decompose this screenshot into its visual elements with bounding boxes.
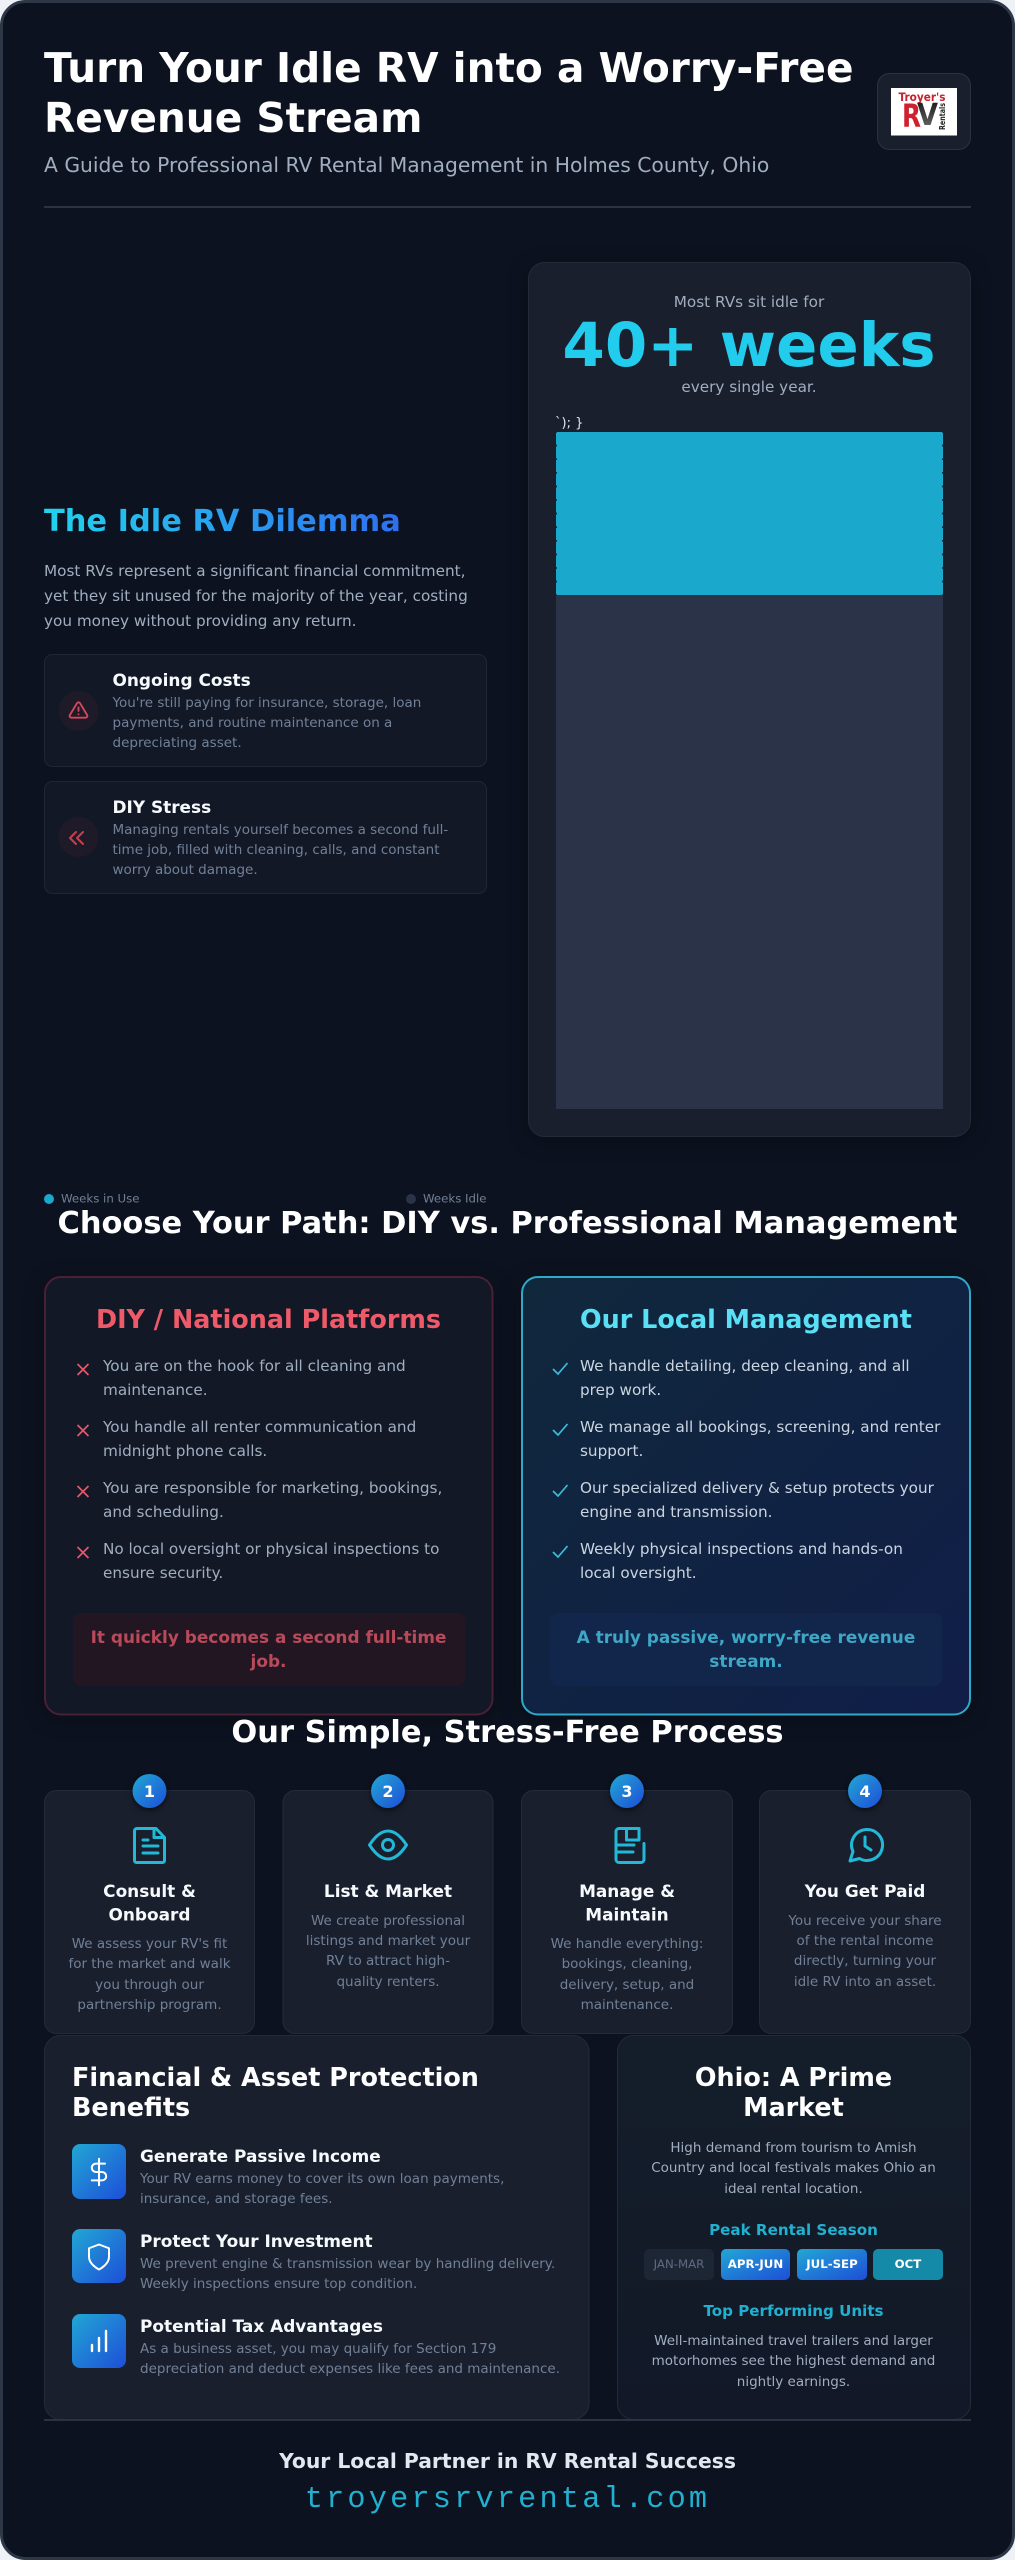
footer: Your Local Partner in RV Rental Success xyxy=(278,2449,736,2473)
heading: choose your path: Choose Your Path: DIY vs. Professional Management xyxy=(58,1206,957,1241)
panel: local management: Our Local Management xyxy=(580,1304,912,1334)
list: local benefits: Our specialized delivery & setup protects your xyxy=(580,1479,935,1497)
step 4: of the rental income xyxy=(797,1933,933,1949)
step 4: You receive your share xyxy=(787,1913,942,1929)
season timeline: APR-JUN xyxy=(728,2257,783,2271)
card: ongoing costs: You're still paying for insurance, storage, loan xyxy=(112,695,421,711)
benefit: protect investment: We prevent engine & transmission wear by handling delivery. xyxy=(140,2256,555,2272)
chart legend: Weeks Idle xyxy=(423,1192,486,1206)
step 1: We assess your RV's fit xyxy=(72,1936,227,1952)
logo: Troyer's xyxy=(898,90,946,104)
step 1: 1 xyxy=(144,1782,155,1801)
icon: shield xyxy=(89,2244,109,2270)
step 2: 2 xyxy=(382,1782,394,1801)
logo: R xyxy=(902,97,921,135)
benefit: passive income: insurance, and storage fees. xyxy=(140,2191,333,2207)
intro paragraph: Most RVs represent a significant financial commitment, xyxy=(44,562,465,580)
intro paragraph: you money without providing any return. xyxy=(44,612,357,630)
intro paragraph: yet they sit unused for the majority of the year, costing xyxy=(44,587,468,605)
list: DIY drawbacks: midnight phone calls. xyxy=(103,1442,267,1460)
card: DIY stress: time job, filled with cleaning, calls, and constant xyxy=(112,842,440,858)
panel: local management xyxy=(522,1277,970,1714)
heading: The Idle RV Dilemma xyxy=(44,504,401,539)
panel: 40+ weeks chart: Most RVs sit idle for xyxy=(674,293,825,311)
chart legend xyxy=(44,1192,486,1206)
benefit: protect investment xyxy=(72,2229,555,2292)
step 2: RV to attract high- xyxy=(326,1953,450,1969)
list: local benefits: support. xyxy=(580,1442,643,1460)
step 4: idle RV into an asset. xyxy=(794,1974,936,1990)
benefit: tax advantages: As a business asset, you may qualify for Section 179 xyxy=(140,2341,496,2357)
step 1: for the market and walk xyxy=(68,1956,231,1972)
logo: Rentals xyxy=(938,103,947,130)
step 3: We handle everything: xyxy=(551,1936,703,1952)
list: local benefits: We handle detailing, deep cleaning, and all xyxy=(580,1357,910,1375)
panel: Ohio market: nightly earnings. xyxy=(737,2374,850,2390)
stacked weeks bar xyxy=(556,432,943,1109)
step 3: bookings, cleaning, xyxy=(562,1956,692,1972)
season timeline xyxy=(644,2249,943,2280)
step 2 xyxy=(283,1774,493,2034)
title: Revenue Stream xyxy=(44,94,422,142)
panel: Ohio market: Market xyxy=(743,2092,844,2122)
panel: Ohio market: ideal rental location. xyxy=(724,2181,863,2197)
list: local benefits: local oversight. xyxy=(580,1564,697,1582)
step 4: You Get Paid xyxy=(804,1881,925,1901)
step 2: We create professional xyxy=(311,1913,465,1929)
step 2: List & Market xyxy=(324,1881,452,1901)
list: local benefits: engine and transmission. xyxy=(580,1503,772,1521)
season timeline: JUL-SEP xyxy=(805,2257,858,2271)
panel: idle dilemma text xyxy=(44,504,486,894)
icon: dollar xyxy=(92,2159,106,2185)
step 3: maintenance. xyxy=(581,1997,673,2013)
benefit: tax advantages: Potential Tax Advantages xyxy=(140,2316,383,2336)
list: DIY drawbacks: maintenance. xyxy=(103,1381,208,1399)
card: DIY stress: DIY Stress xyxy=(112,797,211,817)
list: DIY drawbacks: You handle all renter communication and xyxy=(102,1418,416,1436)
big number: 40+ weeks xyxy=(562,310,936,381)
benefit: protect investment: Weekly inspections ensure top condition. xyxy=(140,2276,417,2292)
callout xyxy=(550,1613,942,1686)
step 1: Consult & xyxy=(103,1881,196,1901)
logo xyxy=(878,74,970,150)
panel: financial benefits: Financial & Asset Protection xyxy=(72,2062,479,2092)
callout: job. xyxy=(250,1651,286,1671)
list: DIY drawbacks: and scheduling. xyxy=(103,1503,224,1521)
step 2: quality renters. xyxy=(336,1974,440,1990)
icon: warning triangle xyxy=(70,702,87,718)
panel: 40+ weeks chart xyxy=(528,262,970,1136)
card: ongoing costs: Ongoing Costs xyxy=(112,670,251,690)
step 1: partnership program. xyxy=(77,1997,222,2013)
season timeline: JAN-MAR xyxy=(653,2257,704,2271)
panel: DIY xyxy=(45,1277,492,1714)
subtitle: A Guide to Professional RV Rental Management in Holmes County, Ohio xyxy=(44,153,769,177)
benefit: tax advantages: depreciation and deduct expenses like fees and maintenance. xyxy=(140,2361,560,2377)
step 3: Maintain xyxy=(585,1904,669,1924)
step 1: Onboard xyxy=(109,1904,190,1924)
panel: Ohio market: Ohio: A Prime xyxy=(695,2062,892,2092)
panel: Ohio market: Peak Rental Season xyxy=(709,2221,878,2239)
panel: Ohio market: Top Performing Units xyxy=(703,2302,884,2320)
icon: document xyxy=(134,1828,164,1862)
panel: Ohio market: High demand from tourism to Amish xyxy=(670,2140,917,2156)
panel: Ohio market: Country and local festivals makes Ohio an xyxy=(651,2160,936,2176)
panel: Ohio market xyxy=(618,2036,970,2420)
heading: process: Our Simple, Stress-Free Process xyxy=(231,1715,784,1750)
icon: calendar form xyxy=(616,1828,644,1862)
card: ongoing costs xyxy=(44,654,486,766)
benefit: passive income xyxy=(72,2144,504,2207)
step 4: 4 xyxy=(859,1782,871,1801)
step 2: listings and market your xyxy=(306,1933,471,1949)
panel: financial benefits: Benefits xyxy=(72,2092,190,2122)
stray code text: `); } xyxy=(555,416,583,431)
callout: A truly passive, worry-free revenue xyxy=(577,1627,915,1647)
benefit: passive income: Your RV earns money to cover its own loan payments, xyxy=(139,2171,504,2187)
callout: stream. xyxy=(709,1651,783,1671)
icon: bars xyxy=(92,2331,106,2351)
logo: V xyxy=(917,98,939,133)
season timeline: OCT xyxy=(895,2257,921,2271)
list: local benefits: We manage all bookings, screening, and renter xyxy=(580,1418,941,1436)
card: DIY stress: Managing rentals yourself becomes a second full- xyxy=(112,822,448,838)
list: local benefits xyxy=(553,1357,941,1582)
panel: 40+ weeks chart: every single year. xyxy=(681,378,817,396)
card: ongoing costs: depreciating asset. xyxy=(112,735,242,751)
panel: Ohio market: motorhomes see the highest demand and xyxy=(652,2353,935,2369)
callout: It quickly becomes a second full-time xyxy=(91,1627,446,1647)
list: DIY drawbacks: ensure security. xyxy=(103,1564,223,1582)
step 4: directly, turning your xyxy=(794,1953,937,1969)
list: DIY drawbacks: You are on the hook for all cleaning and xyxy=(102,1357,406,1375)
footer xyxy=(278,2449,736,2517)
panel: Ohio market: Well-maintained travel trailers and larger xyxy=(654,2333,933,2349)
step 1: you through our xyxy=(95,1977,204,1993)
benefit: passive income: Generate Passive Income xyxy=(140,2146,381,2166)
website url: troyersrvrental.com xyxy=(305,2483,710,2517)
title: Turn Your Idle RV into a Worry-Free xyxy=(44,44,854,92)
step 3 xyxy=(522,1774,732,2034)
card: DIY stress: worry about damage. xyxy=(112,862,258,878)
list: DIY drawbacks: You are responsible for marketing, bookings, xyxy=(102,1479,442,1497)
card: DIY stress xyxy=(44,782,486,894)
step 4 xyxy=(760,1774,970,2034)
icon: double chevron xyxy=(70,832,83,844)
icon: eye xyxy=(370,1831,406,1859)
card: ongoing costs: payments, and routine maintenance on a xyxy=(112,715,392,731)
panel: DIY: DIY / National Platforms xyxy=(96,1304,441,1334)
step 3: 3 xyxy=(621,1782,633,1801)
benefit: protect investment: Protect Your Investment xyxy=(140,2231,373,2251)
icon: chat clock xyxy=(850,1829,883,1861)
step 3: Manage & xyxy=(579,1881,675,1901)
panel: financial benefits xyxy=(44,2036,589,2420)
list: DIY drawbacks xyxy=(78,1357,442,1582)
header xyxy=(44,44,970,177)
chart legend: Weeks in Use xyxy=(61,1192,139,1206)
step 1 xyxy=(44,1774,254,2034)
step 3: delivery, setup, and xyxy=(560,1977,694,1993)
list: local benefits: prep work. xyxy=(580,1381,661,1399)
list: local benefits: Weekly physical inspections and hands-on xyxy=(580,1540,903,1558)
list: DIY drawbacks: No local oversight or physical inspections to xyxy=(103,1540,439,1558)
callout xyxy=(73,1613,465,1686)
benefit: tax advantages xyxy=(72,2314,560,2377)
